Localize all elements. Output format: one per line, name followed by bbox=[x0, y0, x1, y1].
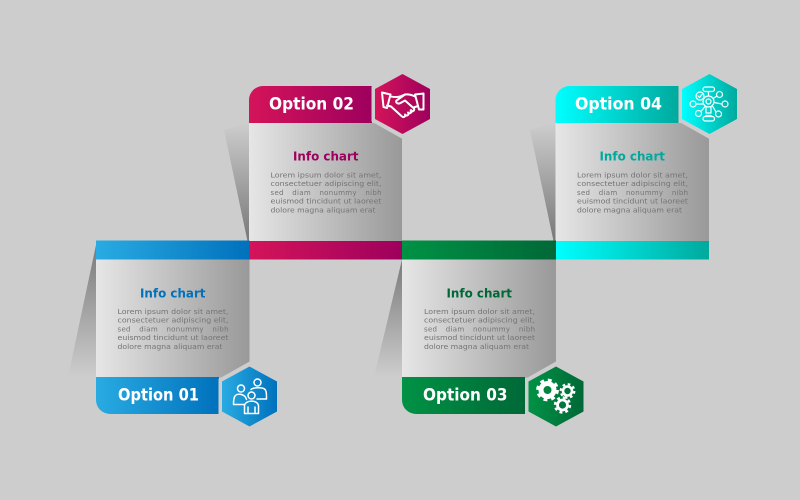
body text 04: sed diam nonummy nibh bbox=[577, 189, 688, 197]
body text 02: dolore magna aliquam erat bbox=[270, 206, 376, 214]
card body 01 bbox=[96, 260, 250, 378]
header tab 02 bbox=[249, 86, 372, 123]
icon: people bbox=[234, 379, 266, 414]
icon: handshake bbox=[382, 92, 424, 117]
body text 04: Lorem ipsum dolor sit amet, bbox=[577, 172, 688, 180]
panel: option 03 bbox=[374, 240, 587, 432]
info title 02: Info chart bbox=[293, 149, 359, 164]
header tab 03 bbox=[402, 377, 525, 414]
header tab 01 bbox=[96, 377, 219, 414]
body text 01: Lorem ipsum dolor sit amet, bbox=[118, 308, 228, 316]
top bar 01 bbox=[96, 240, 250, 260]
option label 02: Option 02 bbox=[269, 94, 354, 113]
info title 01: Info chart bbox=[140, 286, 206, 301]
cast shadow 03 bbox=[374, 260, 402, 377]
body text 01: dolore magna aliquam erat bbox=[118, 343, 223, 351]
body text 01: euismod tincidunt ut laoreet bbox=[118, 334, 229, 342]
body text 03: dolore magna aliquam erat bbox=[424, 343, 529, 351]
body text 03: consectetuer adipiscing elit, bbox=[424, 317, 535, 325]
option label 01: Option 01 bbox=[118, 386, 199, 405]
body text 03: sed diam nonummy nibh bbox=[424, 325, 535, 333]
body text 02: sed diam nonummy nibh bbox=[270, 189, 382, 197]
body text 01: sed diam nonummy nibh bbox=[118, 325, 228, 333]
hexagon halo 01 bbox=[218, 362, 280, 432]
option label 04: Option 04 bbox=[575, 94, 662, 113]
cast shadow 01 bbox=[68, 245, 96, 377]
icon: network bulb bbox=[690, 87, 728, 121]
info title 04: Info chart bbox=[600, 149, 665, 164]
icon: gears bbox=[538, 380, 574, 412]
body text 04 bbox=[577, 172, 688, 214]
body text 02: consectetuer adipiscing elit, bbox=[270, 180, 382, 188]
body text 02: Lorem ipsum dolor sit amet, bbox=[270, 172, 382, 180]
panel: option 04 bbox=[530, 69, 740, 260]
body text 04: dolore magna aliquam erat bbox=[577, 206, 682, 214]
top bar 03 bbox=[402, 240, 556, 260]
card body 03 bbox=[402, 260, 556, 378]
body text 04: euismod tincidunt ut laoreet bbox=[577, 198, 688, 206]
body text 02: euismod tincidunt ut laoreet bbox=[270, 198, 382, 206]
option label 03: Option 03 bbox=[423, 386, 508, 405]
body text 03 bbox=[424, 308, 535, 351]
hexagon halo 02 bbox=[372, 69, 434, 139]
hexagon 01 bbox=[222, 366, 277, 426]
lower bar 04 bbox=[556, 241, 709, 260]
card body 04 bbox=[556, 123, 709, 241]
panel: option 01 bbox=[68, 240, 280, 432]
body text 01 bbox=[118, 308, 229, 351]
panel: option 02 bbox=[224, 69, 434, 260]
hexagon halo 03 bbox=[525, 362, 587, 432]
header tab 04 bbox=[556, 86, 678, 123]
cast shadow 02 bbox=[224, 123, 249, 241]
body text 03: Lorem ipsum dolor sit amet, bbox=[424, 308, 535, 316]
card body 02 bbox=[249, 123, 402, 241]
hexagon halo 04 bbox=[678, 69, 740, 139]
hexagon 03 bbox=[528, 366, 584, 426]
body text 02 bbox=[270, 172, 382, 214]
body text 03: euismod tincidunt ut laoreet bbox=[424, 334, 535, 342]
cast shadow 04 bbox=[530, 123, 556, 241]
body text 04: consectetuer adipiscing elit, bbox=[577, 180, 688, 188]
lower bar 02 bbox=[249, 241, 402, 260]
hexagon 04 bbox=[682, 74, 737, 134]
hexagon 02 bbox=[375, 74, 430, 134]
info title 03: Info chart bbox=[446, 286, 512, 301]
body text 01: consectetuer adipiscing elit, bbox=[118, 317, 228, 325]
